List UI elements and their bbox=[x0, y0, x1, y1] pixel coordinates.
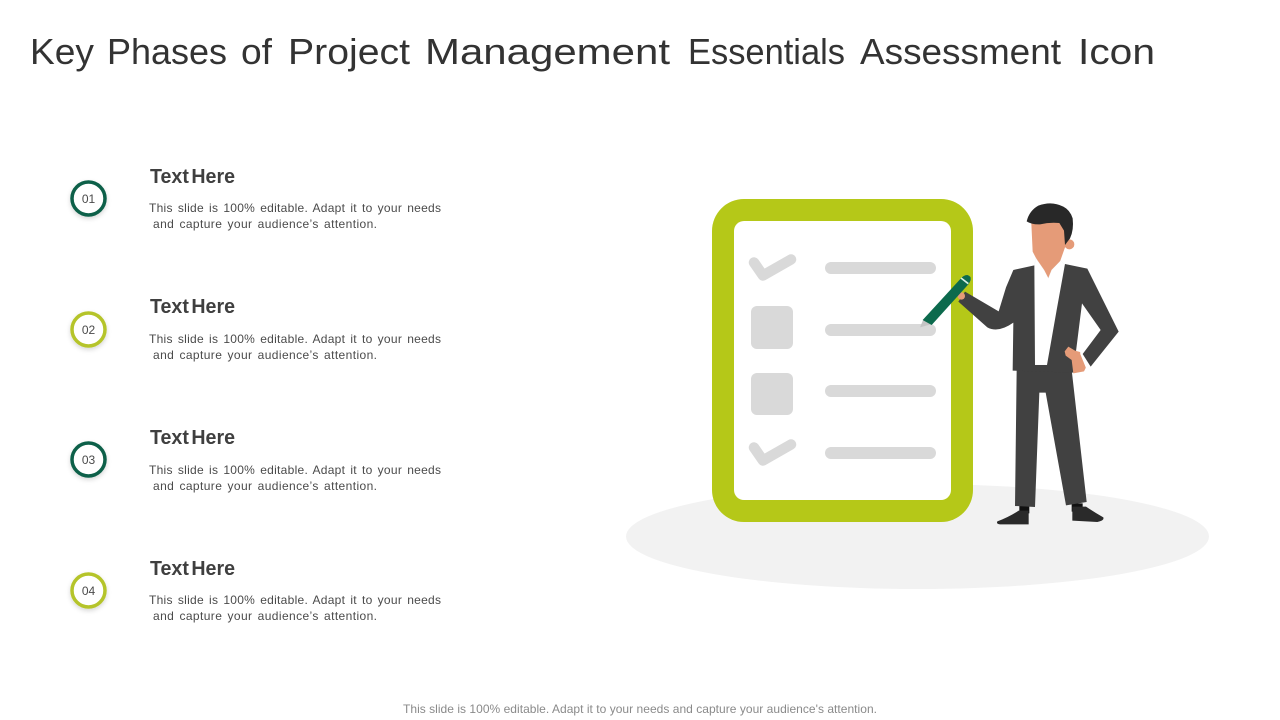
illustration: person presenting a checklist bbox=[626, 199, 1209, 589]
number badge 04: 04 bbox=[82, 584, 95, 598]
list item 03 bbox=[72, 427, 441, 493]
pen bbox=[920, 275, 971, 327]
heading 03: Text Here bbox=[150, 427, 235, 449]
right hand bbox=[1065, 347, 1086, 373]
body text 01 bbox=[149, 201, 441, 231]
icon: empty box 2 bbox=[751, 373, 793, 415]
body text 04: and capture your audience’s attention. bbox=[153, 609, 377, 623]
heading 02: Text Here bbox=[150, 296, 235, 318]
icon: empty box 1 bbox=[751, 306, 793, 349]
title: Key bbox=[30, 31, 94, 72]
list item 04 bbox=[72, 558, 441, 623]
body text 02 bbox=[149, 332, 441, 362]
body text 04 bbox=[149, 593, 441, 623]
line 3 bbox=[825, 385, 936, 397]
title: Phases bbox=[107, 31, 227, 72]
title: of bbox=[241, 31, 273, 72]
number badge 03: 03 bbox=[82, 453, 95, 467]
jacket and arms bbox=[958, 264, 1119, 373]
footer note: This slide is 100% editable. Adapt it to your needs and capture your audience's attention. bbox=[403, 702, 877, 716]
number badge 02: 02 bbox=[82, 323, 95, 337]
line 1 bbox=[825, 262, 936, 274]
heading 01: Text Here bbox=[150, 166, 235, 188]
checklist board bbox=[712, 199, 973, 522]
body text 01: This slide is 100% editable. Adapt it to your needs bbox=[149, 201, 441, 215]
body text 04: This slide is 100% editable. Adapt it to your needs bbox=[149, 593, 441, 607]
list item 01 bbox=[72, 166, 441, 231]
title: Management bbox=[425, 31, 670, 72]
body text 03: and capture your audience’s attention. bbox=[153, 479, 377, 493]
hair bbox=[1027, 203, 1073, 245]
number badge 01: 01 bbox=[82, 192, 95, 206]
title: Essentials bbox=[688, 31, 845, 72]
line 2 bbox=[825, 324, 936, 336]
neck and face bbox=[1031, 222, 1065, 278]
ground shadow bbox=[626, 484, 1209, 589]
trousers bbox=[1015, 370, 1087, 507]
body text 03 bbox=[149, 463, 441, 493]
body text 02: This slide is 100% editable. Adapt it to your needs bbox=[149, 332, 441, 346]
body text 03: This slide is 100% editable. Adapt it to your needs bbox=[149, 463, 441, 477]
heading 04: Text Here bbox=[150, 558, 235, 580]
shirt bbox=[1034, 258, 1065, 365]
number badge 03 bbox=[72, 443, 105, 476]
number badge 01 bbox=[72, 182, 105, 215]
title: Project bbox=[288, 31, 410, 72]
number badge 02 bbox=[72, 313, 105, 346]
person bbox=[920, 203, 1119, 524]
list item 02 bbox=[72, 296, 441, 362]
fist bbox=[958, 292, 965, 300]
ear bbox=[1064, 239, 1074, 249]
socks bbox=[1019, 503, 1083, 513]
number badge 04 bbox=[72, 574, 105, 607]
title: Assessment bbox=[860, 31, 1061, 72]
line 4 bbox=[825, 447, 936, 459]
shirt cuff bbox=[1080, 353, 1089, 368]
body text 02: and capture your audience’s attention. bbox=[153, 348, 377, 362]
shoes bbox=[997, 507, 1104, 524]
icon: check mark 1 bbox=[754, 260, 791, 276]
title: Icon bbox=[1078, 31, 1155, 72]
body text 01: and capture your audience’s attention. bbox=[153, 217, 377, 231]
icon: check mark 2 bbox=[754, 444, 791, 460]
